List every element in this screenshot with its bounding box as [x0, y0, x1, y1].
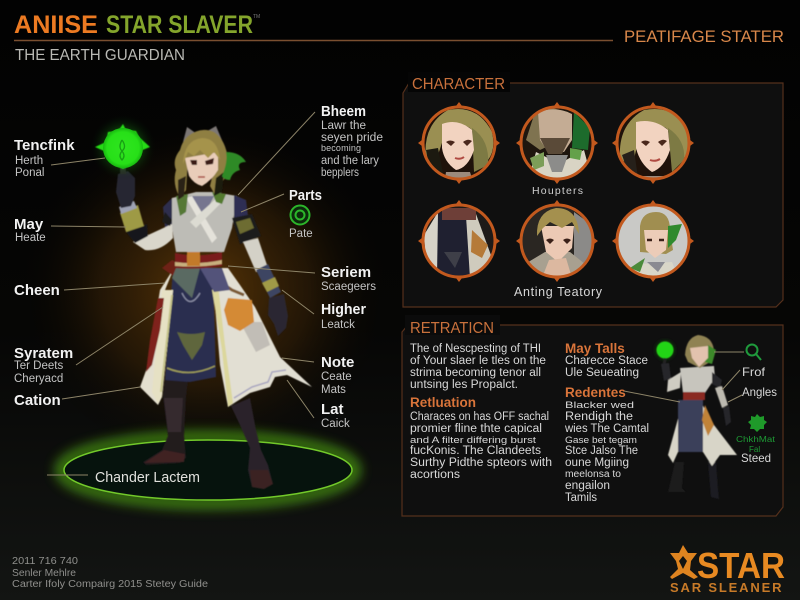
label: May — [14, 216, 46, 244]
title: ANIISE — [14, 11, 98, 39]
label: Bheem: and the lary — [321, 155, 379, 167]
title — [14, 11, 260, 39]
portrait 6 — [612, 200, 695, 283]
label: Lat — [321, 401, 350, 430]
green hair ribbon — [222, 152, 246, 180]
portrait 3 — [612, 102, 695, 185]
label: Higher: Leatck — [321, 319, 355, 331]
body text left 2 — [410, 411, 552, 481]
header right label: PEATIFAGE STATER — [624, 27, 784, 46]
label: Note — [321, 354, 354, 396]
body text middle 2: Tamils — [565, 492, 597, 504]
subheading: Redentes: Redentes — [565, 385, 626, 400]
label: Higher — [321, 301, 366, 331]
mini character — [651, 335, 737, 499]
title: STAR SLAVER — [106, 11, 253, 39]
panel: retraction — [402, 315, 783, 516]
mini label: Steed: Steed — [741, 451, 771, 465]
label: Cation: Cation — [14, 392, 61, 409]
body text middle: Ule Seueating — [565, 367, 639, 379]
body text left 2: fucKonis. The Clandeets — [410, 445, 541, 457]
panel: character portraits — [403, 72, 783, 307]
mini label: green: Fal — [749, 445, 760, 454]
label: Tencfink: Tencfink — [14, 137, 75, 154]
body text left 2: and A filter differing burst — [410, 435, 537, 445]
panel heading: CHARACTER — [412, 76, 505, 93]
label: Tencfink — [14, 137, 75, 179]
title: TM — [253, 14, 260, 20]
body text middle 2: Blacker wed — [565, 400, 634, 411]
ears — [183, 126, 224, 145]
label: Chander Lactem: Chander Lactem — [95, 469, 200, 486]
label: Note: Ceate — [321, 371, 352, 383]
body text left: The of Nescpesting of THI — [410, 343, 541, 355]
icon: magnifier — [746, 344, 761, 360]
header rule — [14, 40, 613, 42]
character figure — [116, 126, 312, 489]
body text left 2: acortions — [410, 469, 460, 481]
mini label: green — [736, 435, 776, 454]
tassel — [224, 298, 254, 331]
right coat panel — [212, 268, 312, 407]
subheading: Retluation: Retluation — [410, 395, 476, 410]
body text left 2: Characes on has OFF sachal — [410, 411, 549, 423]
icon: star figure — [670, 545, 698, 579]
portrait 2 — [516, 102, 598, 185]
label: Tencfink: Ponal — [15, 167, 44, 179]
mini label: Angles: Angles — [742, 385, 777, 399]
left coat panel with red lining — [140, 268, 174, 405]
label: Syratem: Syratem — [14, 345, 73, 362]
body text middle 2: Stce Jalso The — [565, 445, 638, 457]
label: Syratem — [14, 345, 73, 385]
label: May: Heate — [15, 232, 46, 244]
red tails under sash — [162, 260, 190, 282]
label: Seriem — [321, 264, 376, 293]
label: May: May — [14, 216, 44, 233]
logo: SAR SLEANER — [670, 580, 783, 595]
logo — [670, 545, 785, 595]
label: Lat: Caick — [321, 418, 350, 430]
portrait 5 — [516, 200, 598, 285]
label: Bheem: Lawr the — [321, 120, 366, 132]
navy skirt — [165, 268, 216, 382]
body text middle 2: oune Mgiing — [565, 457, 629, 469]
body text left — [410, 343, 546, 391]
green energy orb — [89, 113, 157, 181]
portrait 1 — [418, 102, 500, 185]
ground ring — [61, 437, 355, 503]
fringe — [183, 138, 220, 164]
eyes and mouth — [190, 158, 214, 165]
label: Parts with icon — [289, 187, 322, 240]
footer credits: Carter Ifoly Compairg 2015 Stetey Guide — [12, 579, 208, 590]
raised arm — [163, 198, 172, 228]
portrait caption: Houpters: Houpters — [532, 185, 583, 197]
hair — [175, 130, 228, 198]
label: Cheen: Cheen — [14, 282, 60, 299]
sash — [175, 252, 222, 269]
torso tunic — [172, 192, 237, 252]
mini label: Frof: Frof — [742, 365, 766, 379]
body text middle: Charecce Stace — [565, 355, 648, 367]
body text left: of Your slaer le tles on the — [410, 355, 546, 367]
left boot — [143, 380, 188, 465]
label: Parts with icon: Parts — [289, 187, 322, 204]
label: Tencfink: Herth — [15, 155, 43, 167]
right boot — [231, 398, 273, 489]
footer credits — [12, 556, 208, 590]
body text middle 2: Gase bet tegam — [565, 435, 637, 446]
label: Lat: Lat — [321, 401, 344, 418]
callout lines — [47, 112, 315, 475]
logo: STAR — [697, 545, 785, 586]
label: Bheem: bepplers — [321, 167, 359, 179]
label: Bheem: Bheem — [321, 103, 366, 120]
icon: green rune — [290, 206, 310, 224]
footer credits: Senler Mehlre — [12, 568, 76, 579]
label: Bheem — [321, 103, 383, 179]
label: Bheem: seyen pride — [321, 132, 383, 144]
body text middle — [565, 355, 648, 379]
body text middle 2: wies The Camtal — [564, 423, 649, 435]
subheading: May Talls: May Talls — [565, 341, 625, 356]
footer credits: 2011 716 740 — [12, 556, 78, 567]
body text middle 2 — [564, 400, 649, 504]
label: Seriem: Seriem — [321, 264, 371, 281]
face — [185, 152, 218, 186]
body text left 2: Surthy Pidthe spteors with — [410, 457, 552, 469]
body text left: untsing les Propalct. — [410, 379, 518, 391]
label: Higher: Higher — [321, 301, 366, 318]
icon: green clover — [748, 414, 767, 432]
label: Syratem: Ter Deets — [14, 360, 63, 372]
mini label: green: ChkhMat — [736, 435, 776, 444]
mini callout lines — [624, 352, 744, 402]
portrait caption: Anting Teatory: Anting Teatory — [514, 285, 603, 299]
label: Seriem: Scaegeers — [321, 281, 376, 293]
portrait 4 — [418, 200, 500, 283]
body text left: strima becoming tenor all — [410, 367, 541, 379]
label: Parts with icon: Pate — [289, 228, 313, 240]
lowered glove — [268, 294, 288, 336]
raised glove — [116, 171, 135, 208]
label: Bheem: becoming — [321, 143, 361, 153]
label: Note: Note — [321, 354, 354, 371]
body text middle 2: engailon — [565, 480, 610, 492]
body text middle 2: Rendigh the — [565, 411, 633, 423]
lowered arm — [234, 195, 248, 218]
label: Note: Mats — [321, 384, 346, 396]
ambient amber glow behind character — [15, 115, 395, 465]
body text left 2: promier fline thte capical — [410, 423, 542, 435]
panel heading: RETRATICN — [410, 320, 494, 337]
body text middle 2: meelonsa to — [565, 469, 621, 480]
subtitle: THE EARTH GUARDIAN — [15, 47, 185, 64]
label: Syratem: Cheryacd — [14, 373, 63, 385]
